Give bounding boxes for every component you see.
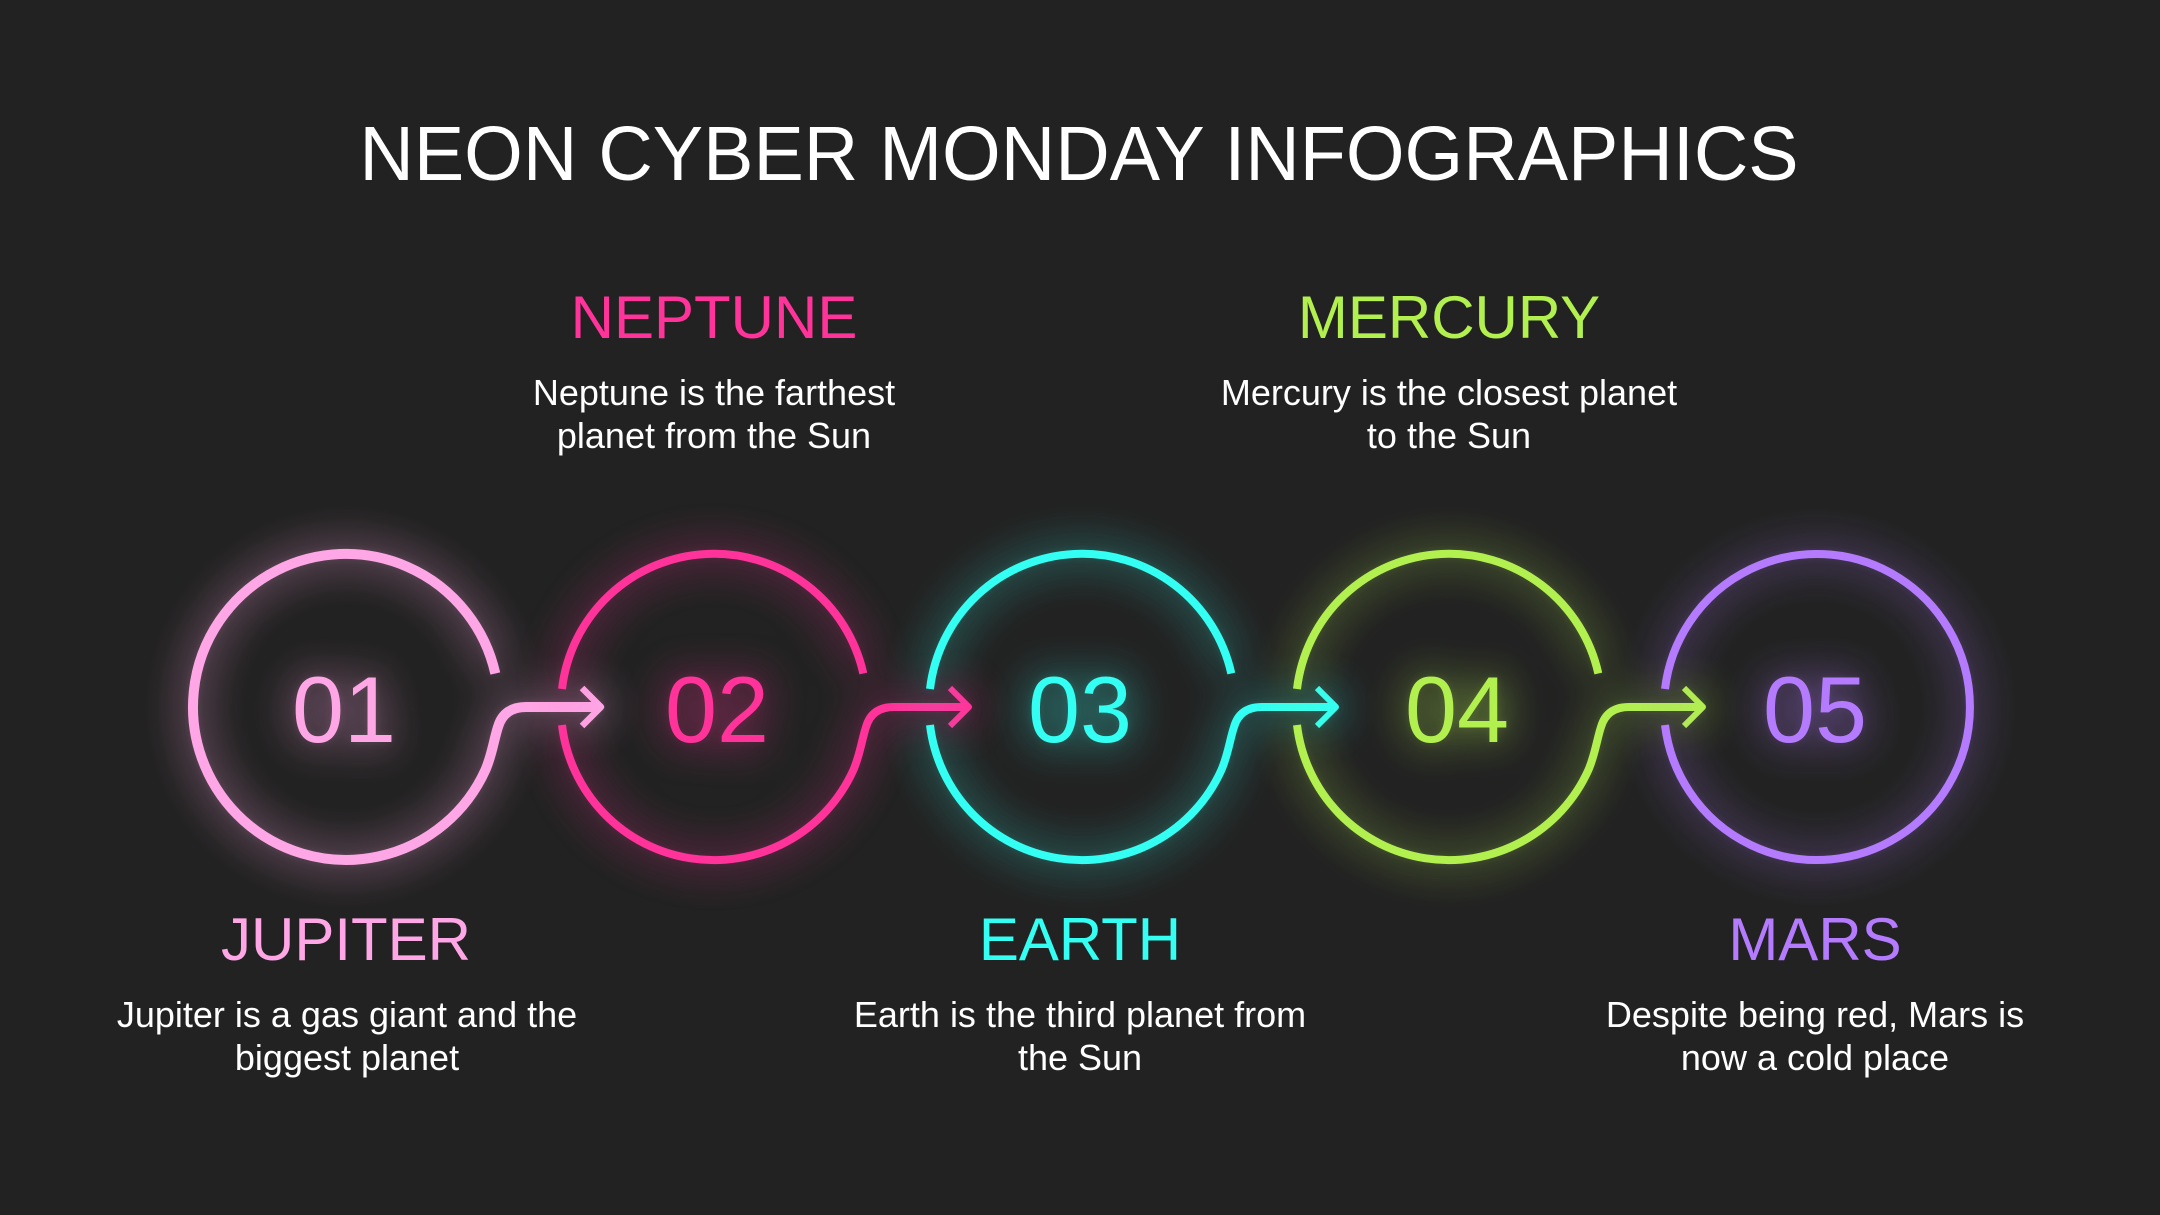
label: Mars: MARS [1728, 906, 1902, 973]
label: Jupiter: Jupiter is a gas giant and the [117, 994, 577, 1035]
label: Neptune: planet from the Sun [557, 415, 871, 456]
step 02: Neptune circle: 02 [665, 657, 769, 762]
step 04: Mercury circle [1297, 554, 1703, 860]
step 01: Jupiter circle: 01 [292, 657, 396, 762]
step 03: Earth circle: 03 [1028, 657, 1132, 762]
label: Mars [1606, 906, 2024, 1078]
step 05: Mars circle: 05 [1763, 657, 1867, 762]
label: Mercury: Mercury is the closest planet [1221, 372, 1677, 413]
title: NEON CYBER MONDAY INFOGRAPHICS [359, 111, 1799, 197]
label: Earth: Earth is the third planet from [854, 994, 1306, 1035]
label: Earth: EARTH [979, 906, 1181, 973]
label: Jupiter [117, 906, 577, 1078]
label: Neptune: NEPTUNE [571, 284, 857, 351]
label: Mercury [1221, 284, 1677, 456]
label: Mercury: to the Sun [1367, 415, 1531, 456]
step 03: Earth circle [930, 554, 1336, 860]
step 02: Neptune circle [562, 554, 969, 860]
step 05: Mars circle [1665, 554, 1970, 860]
label: Mercury: MERCURY [1298, 284, 1600, 351]
label: Mars: now a cold place [1681, 1037, 1949, 1078]
label: Earth: the Sun [1018, 1037, 1142, 1078]
step 01: Jupiter circle [193, 554, 601, 860]
label: Earth [854, 906, 1306, 1078]
label: Neptune: Neptune is the farthest [533, 372, 895, 413]
label: Neptune [533, 284, 895, 456]
label: Jupiter: JUPITER [221, 906, 471, 973]
step 04: Mercury circle: 04 [1405, 657, 1509, 762]
label: Mars: Despite being red, Mars is [1606, 994, 2024, 1035]
label: Jupiter: biggest planet [235, 1037, 459, 1078]
